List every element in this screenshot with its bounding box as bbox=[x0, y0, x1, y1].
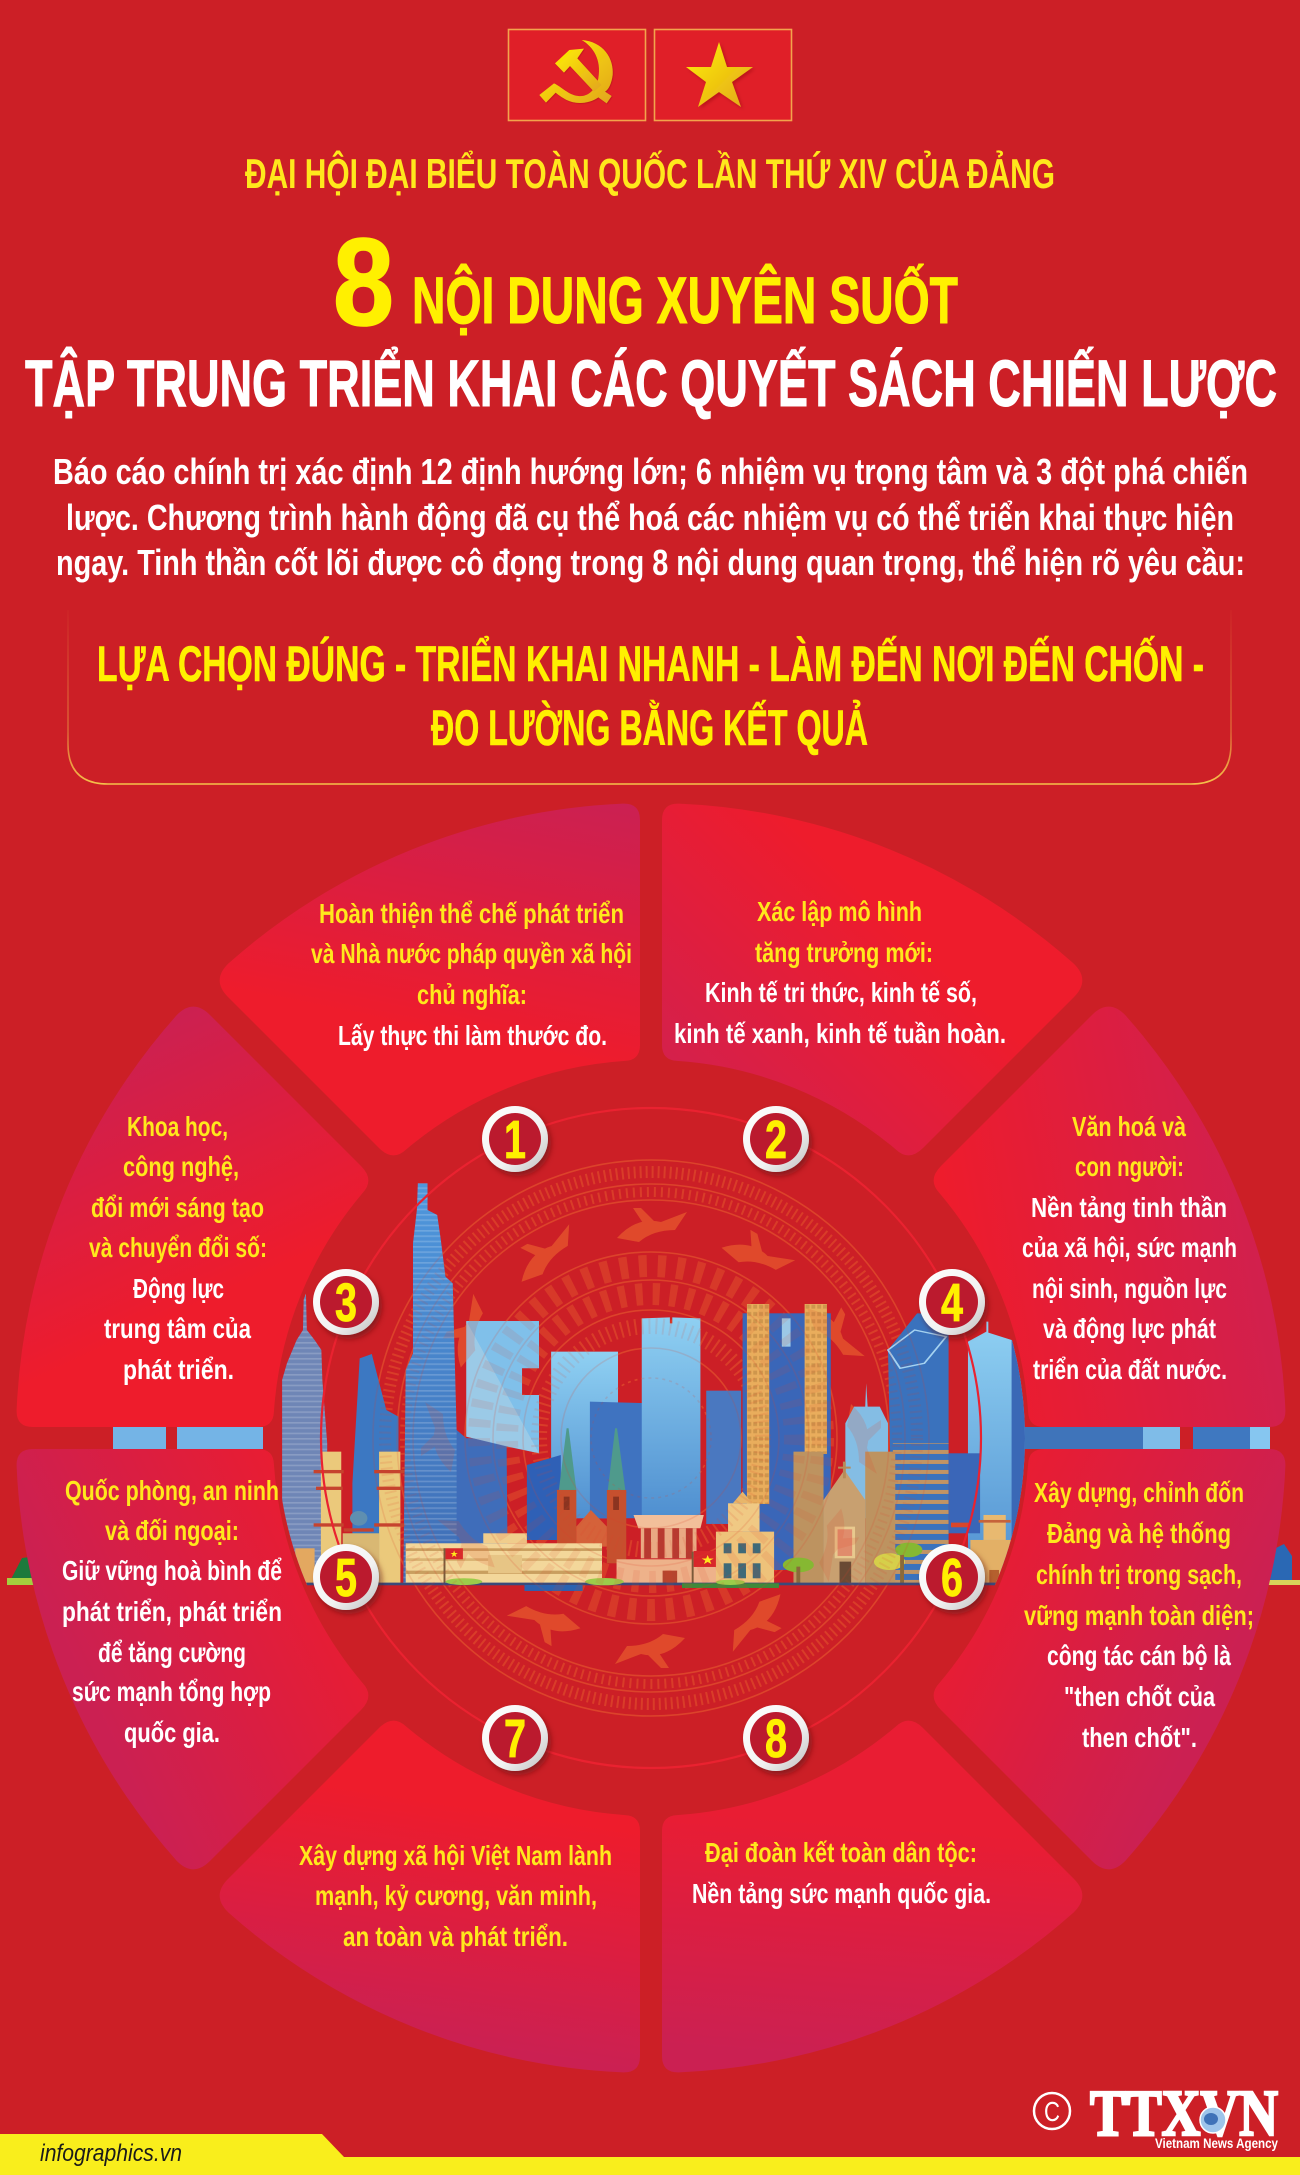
sector 7 text: mạnh, kỷ cương, văn minh, bbox=[315, 1880, 597, 1911]
sector 4 text: triển của đất nước. bbox=[1033, 1354, 1227, 1385]
mausoleum flag bbox=[692, 1550, 716, 1583]
copyright mark: C bbox=[1044, 2096, 1060, 2127]
sector 4 shape bbox=[934, 1007, 1285, 1427]
thin ring bbox=[321, 1108, 981, 1768]
number badge 1: 1 bbox=[504, 1110, 526, 1170]
side skyline strips bbox=[7, 1427, 1300, 1585]
eight sectors bbox=[17, 804, 1285, 2072]
sector 8 text bbox=[692, 1837, 991, 1909]
blue building bbox=[706, 1391, 741, 1524]
number badge 3: 3 bbox=[335, 1273, 357, 1333]
number badge 4 bbox=[919, 1269, 985, 1335]
sector 3 text: Khoa học, bbox=[127, 1111, 228, 1142]
sector 2 shape bbox=[662, 804, 1082, 1155]
national flag with star bbox=[654, 30, 792, 120]
city skyline illustration bbox=[282, 1183, 1025, 1591]
number badge 7: 7 bbox=[504, 1709, 526, 1769]
sector 2 text: tăng trưởng mới: bbox=[755, 937, 933, 968]
sector 4 text: con người: bbox=[1075, 1151, 1184, 1182]
drum overlay on buildings bbox=[372, 1253, 930, 1591]
sector 1 shape bbox=[220, 804, 640, 1155]
sector 1 text: chủ nghĩa: bbox=[417, 979, 527, 1010]
sector 1 text bbox=[311, 898, 632, 1051]
dark block left bbox=[457, 1430, 508, 1550]
sector 3 text: phát triển. bbox=[123, 1354, 234, 1385]
sector 2 text: Xác lập mô hình bbox=[757, 896, 922, 927]
Notre Dame cathedral bbox=[557, 1428, 626, 1563]
right light tower bbox=[845, 1313, 949, 1585]
intro paragraph bbox=[53, 451, 1248, 583]
sector 5 text: và đối ngoại: bbox=[105, 1515, 239, 1546]
sector 4 text: Văn hoá và bbox=[1072, 1111, 1186, 1142]
grey tower bbox=[282, 1290, 327, 1585]
Cao Dai temple bbox=[314, 1452, 404, 1585]
sector 7 text: an toàn và phát triển. bbox=[343, 1921, 568, 1952]
sector 8 shape bbox=[662, 1721, 1082, 2072]
sector 6 text bbox=[1024, 1477, 1254, 1753]
far right towers bbox=[949, 1322, 1031, 1585]
far right temple bbox=[970, 1515, 1014, 1585]
number badge 4: 4 bbox=[941, 1273, 963, 1333]
low blue block bbox=[527, 1455, 561, 1540]
sector 6 text: "then chốt của bbox=[1064, 1681, 1215, 1712]
middle blue building bbox=[590, 1402, 642, 1518]
sector 2 text: Kinh tế tri thức, kinh tế số, bbox=[705, 977, 977, 1008]
big number 8: 8 bbox=[333, 214, 394, 352]
sector 5 text: quốc gia. bbox=[124, 1717, 220, 1748]
sector 3 text: đổi mới sáng tạo bbox=[91, 1192, 264, 1223]
slogan box: ĐO LƯỜNG BẰNG KẾT QUẢ bbox=[431, 700, 868, 756]
sector 6 text: then chốt". bbox=[1082, 1722, 1197, 1753]
palace flag bbox=[444, 1548, 463, 1584]
light building left bbox=[466, 1321, 539, 1453]
sector 5 text: phát triển, phát triển bbox=[62, 1596, 282, 1627]
TTXVN logo: Vietnam News Agency bbox=[1155, 2135, 1278, 2151]
number badge 5: 5 bbox=[335, 1548, 357, 1608]
sector 5 shape bbox=[17, 1449, 368, 1869]
number badge 1 bbox=[482, 1106, 548, 1172]
Independence Palace bbox=[406, 1533, 602, 1584]
sector 8 text: Nền tảng sức mạnh quốc gia. bbox=[692, 1878, 991, 1909]
drum pattern backdrop bbox=[373, 1160, 929, 1716]
sector 5 text: để tăng cường bbox=[98, 1637, 246, 1668]
sector 6 text: chính trị trong sạch, bbox=[1036, 1559, 1242, 1590]
sector 7 shape bbox=[220, 1721, 640, 2072]
sector 7 text bbox=[299, 1840, 612, 1952]
sector 3 text: trung tâm của bbox=[104, 1313, 251, 1344]
sector 4 text: của xã hội, sức mạnh bbox=[1022, 1232, 1237, 1263]
mausoleum flag: ★ bbox=[701, 1554, 714, 1566]
sector 6 text: Đảng và hệ thống bbox=[1047, 1518, 1231, 1549]
sector 5 text: Quốc phòng, an ninh bbox=[65, 1475, 279, 1506]
sector 2 text bbox=[674, 896, 1006, 1049]
Bitexco tower bbox=[352, 1354, 398, 1585]
slogan box bbox=[68, 610, 1231, 784]
number badge 5 bbox=[313, 1544, 379, 1610]
sector 6 shape bbox=[934, 1449, 1285, 1869]
St Joseph cathedral bbox=[793, 1452, 895, 1585]
palm trees bbox=[783, 1543, 922, 1585]
headline line 1: NỘI DUNG XUYÊN SUỐT bbox=[412, 263, 958, 337]
Landmark 81 tower bbox=[403, 1183, 461, 1585]
sector 4 text: nội sinh, nguồn lực bbox=[1032, 1273, 1227, 1304]
sector 4 text: Nền tảng tinh thần bbox=[1031, 1192, 1227, 1223]
copyright mark bbox=[1034, 2093, 1070, 2129]
sector 3 shape bbox=[17, 1007, 368, 1427]
red flags pole bbox=[951, 1523, 969, 1527]
far left pavilion bbox=[295, 1548, 315, 1585]
title block bbox=[25, 149, 1277, 420]
header emblems bbox=[508, 30, 792, 120]
sector 3 text: Động lực bbox=[133, 1273, 224, 1304]
number badge 6 bbox=[919, 1544, 985, 1610]
sector 8 text: Đại đoàn kết toàn dân tộc: bbox=[705, 1837, 977, 1868]
sector 3 text bbox=[89, 1111, 267, 1385]
sector 4 text bbox=[1022, 1111, 1237, 1385]
tall light building bbox=[642, 1317, 700, 1518]
sector 6 text: công tác cán bộ là bbox=[1047, 1640, 1231, 1671]
number badge 8: 8 bbox=[765, 1709, 787, 1769]
number badge 3 bbox=[313, 1269, 379, 1335]
sector 4 text: và động lực phát bbox=[1043, 1313, 1216, 1344]
sector 5 text bbox=[62, 1475, 282, 1748]
number badge 7 bbox=[482, 1705, 548, 1771]
sector 2 text: kinh tế xanh, kinh tế tuần hoàn. bbox=[674, 1018, 1006, 1049]
Ho Chi Minh mausoleum bbox=[617, 1515, 721, 1585]
sector 7 text: Xây dựng xã hội Việt Nam lành bbox=[299, 1840, 612, 1871]
sector 5 text: Giữ vững hoà bình để bbox=[62, 1555, 282, 1586]
sector 1 text: Hoàn thiện thể chế phát triển bbox=[319, 898, 624, 929]
footer band bbox=[0, 2134, 1300, 2175]
footer band: infographics.vn bbox=[40, 2140, 182, 2167]
sector 5 text: sức mạnh tổng hợp bbox=[72, 1676, 271, 1707]
middle light building bbox=[551, 1352, 618, 1518]
number badge 8 bbox=[743, 1705, 809, 1771]
party flag with hammer and sickle bbox=[508, 30, 646, 120]
sector 3 text: và chuyển đổi số: bbox=[89, 1232, 267, 1263]
palace flag: ★ bbox=[450, 1550, 458, 1558]
ground shrubs bbox=[299, 1578, 1012, 1591]
number badge 6: 6 bbox=[941, 1548, 963, 1608]
sector 1 text: Lấy thực thi làm thước đo. bbox=[338, 1020, 607, 1051]
twin gold tower bbox=[743, 1304, 831, 1570]
number badge 2 bbox=[743, 1106, 809, 1172]
number badge 2: 2 bbox=[765, 1110, 787, 1170]
colonial hall bbox=[716, 1492, 774, 1585]
sector 1 text: và Nhà nước pháp quyền xã hội bbox=[311, 938, 632, 969]
sector 3 text: công nghệ, bbox=[123, 1151, 239, 1182]
